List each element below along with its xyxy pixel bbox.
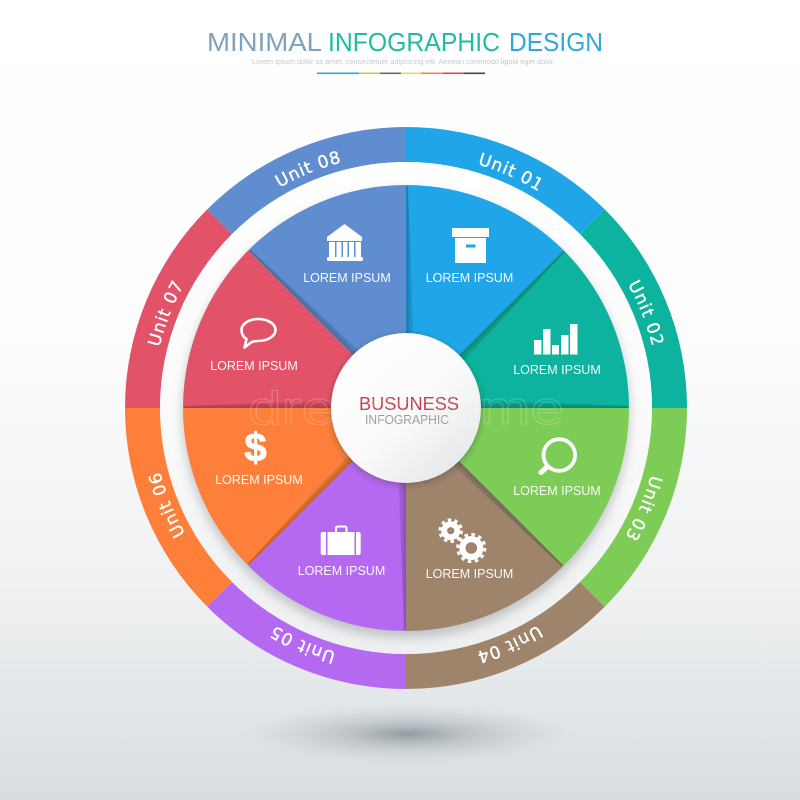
ring labels: Unit 06	[148, 474, 184, 539]
wedge label: unit 06: LOREM IPSUM	[215, 473, 303, 487]
wedge label: unit 08: LOREM IPSUM	[303, 271, 391, 285]
wedge: unit 06	[183, 408, 406, 566]
ring segment: unit 03	[580, 408, 687, 607]
icon: bar chart	[534, 324, 578, 354]
wedge: unit 02	[406, 250, 629, 408]
ring labels	[148, 151, 664, 664]
heading: DESIGN	[509, 27, 603, 57]
ring segment: unit 04	[406, 582, 605, 689]
colored divider	[317, 72, 485, 74]
icon: magnifier	[541, 439, 575, 472]
wedge: unit 08	[248, 185, 406, 408]
wedge: unit 01	[406, 185, 564, 408]
ring labels: Unit 02	[630, 280, 664, 345]
wedge: unit 03	[406, 408, 629, 566]
center badge shadow	[330, 334, 482, 486]
wedge label: unit 02: LOREM IPSUM	[513, 363, 601, 377]
subtitle: Lorem ipsum dolor sit amet, consectetuer adipiscing elit. Aenean commodo ligula eget dolor.	[252, 57, 555, 66]
icon: archive box	[452, 228, 489, 263]
wedge label: unit 05: LOREM IPSUM	[298, 564, 385, 578]
ring labels: Unit 03	[627, 477, 663, 540]
heading: MINIMAL	[207, 27, 322, 57]
floor shadow	[243, 704, 573, 764]
icon: briefcase	[321, 526, 361, 555]
wedge label: unit 01: LOREM IPSUM	[426, 271, 513, 285]
icon: gears	[440, 520, 485, 562]
heading: INFOGRAPHIC	[328, 27, 500, 57]
wedge label: unit 04: LOREM IPSUM	[426, 567, 513, 581]
wedge: unit 07	[183, 250, 406, 408]
white separator ring	[160, 162, 652, 654]
ring segment: unit 06	[125, 408, 232, 607]
heading	[207, 27, 603, 57]
center badge	[331, 333, 481, 483]
wedge: unit 04	[406, 408, 564, 631]
ring labels: Unit 04	[478, 627, 544, 664]
ring labels: Unit 01	[480, 152, 542, 191]
wedge label: unit 07: LOREM IPSUM	[210, 359, 298, 373]
ring segment: unit 01	[406, 127, 605, 234]
ring labels: Unit 08	[274, 151, 340, 186]
ring segment: unit 05	[207, 582, 406, 689]
outer ring	[125, 127, 687, 689]
icon: dollar sign: $	[244, 426, 267, 470]
icon: speech bubble	[242, 319, 276, 348]
badge subtitle: INFOGRAPHIC	[365, 413, 449, 427]
icon: bank	[327, 224, 363, 261]
wedge label: unit 03: LOREM IPSUM	[513, 484, 601, 498]
ring segment: unit 07	[125, 209, 232, 408]
pie drop shadow	[182, 190, 630, 638]
wedge: unit 05	[248, 408, 406, 631]
ring segment: unit 08	[207, 127, 406, 234]
ring segment: unit 02	[580, 209, 687, 408]
ring labels: Unit 05	[270, 627, 334, 664]
watermark: dreamstime	[248, 382, 564, 434]
pie wedges	[183, 185, 629, 631]
ring labels: Unit 07	[148, 280, 182, 345]
badge title: BUSUNESS	[359, 393, 459, 414]
title block	[207, 27, 603, 74]
